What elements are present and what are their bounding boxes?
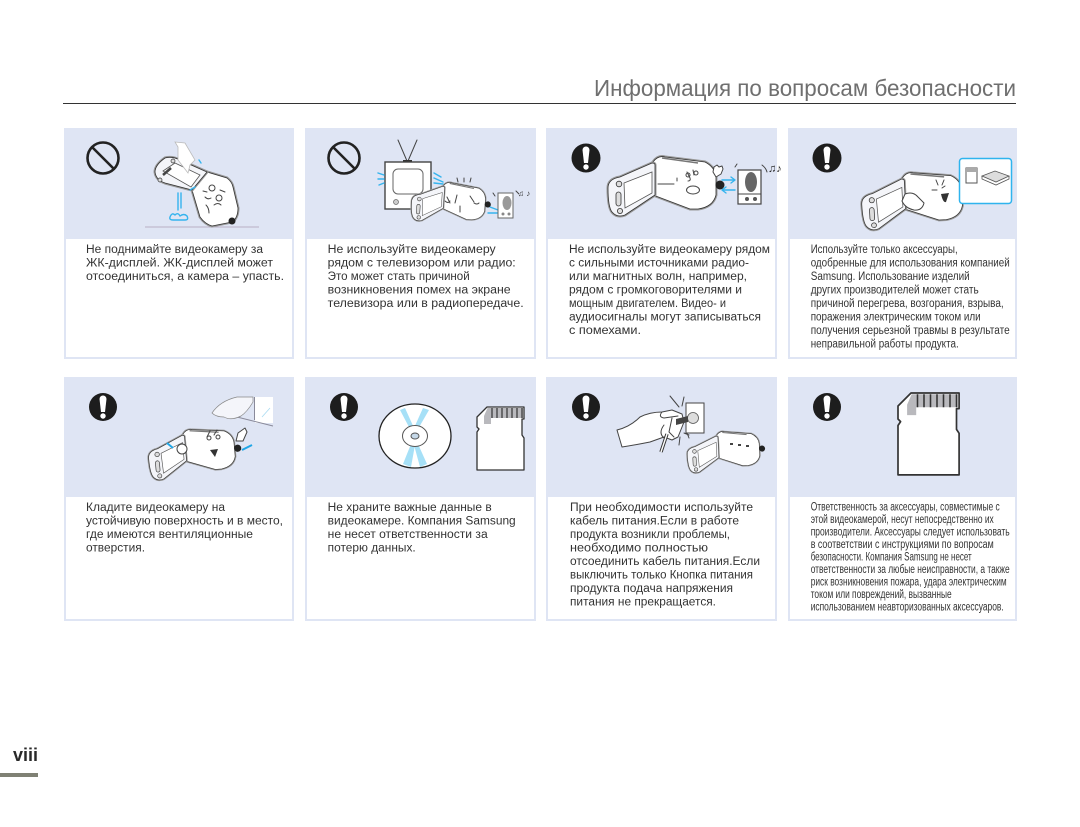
text block: необходимо полностью bbox=[570, 542, 708, 554]
text block: питания не прекращается. bbox=[570, 596, 716, 608]
text block: ЖК-дисплей. ЖК-дисплей может bbox=[86, 258, 274, 270]
text block: видеокамере. Компания Samsung bbox=[328, 516, 516, 528]
icon: caution bbox=[813, 393, 841, 421]
footer bar bbox=[0, 773, 38, 777]
text block: или магнитных волн, например, bbox=[569, 271, 747, 283]
panel: power cable bbox=[546, 377, 777, 621]
icon: caution bbox=[330, 393, 358, 421]
text block: Кладите видеокамеру на bbox=[86, 502, 226, 514]
text block: выключить только Кнопка питания bbox=[570, 570, 753, 582]
illustration: camera with accessories bbox=[860, 158, 1012, 230]
icon: prohibited bbox=[88, 142, 118, 174]
text block: кабель питания.Если в работе bbox=[570, 516, 739, 528]
text block bbox=[86, 244, 284, 283]
page number: viii bbox=[13, 745, 38, 765]
text block: Samsung. Использование изделий bbox=[811, 271, 970, 283]
text block: отсоединить кабель питания.Если bbox=[570, 556, 760, 568]
text block: Ответственность за аксессуары, совместимые с bbox=[811, 502, 1000, 514]
text block: Не используйте видеокамеру bbox=[328, 244, 496, 256]
illustration: camera and loudspeaker bbox=[608, 157, 782, 216]
illustration: camera and loudspeaker: ♫♪ bbox=[768, 163, 782, 175]
text block bbox=[328, 502, 516, 554]
text block bbox=[811, 244, 1010, 350]
text block: аудиосигналы могут записываться bbox=[569, 312, 761, 324]
illustration: hand unplugging cable bbox=[617, 396, 766, 473]
text block: продукта подача напряжения bbox=[570, 583, 733, 595]
icon: caution bbox=[572, 393, 600, 421]
text block bbox=[328, 244, 524, 310]
text block: этой видеокамерой, несут непосредственно их bbox=[811, 514, 994, 526]
text block: получения серьезной травмы в результате bbox=[811, 325, 1010, 337]
text block bbox=[570, 502, 760, 608]
icon: caution bbox=[812, 144, 842, 172]
text block: неправильной работы продукта. bbox=[811, 338, 959, 350]
icon: prohibited bbox=[328, 142, 360, 174]
text block: безопасности. Компания Samsung не несет bbox=[811, 552, 972, 564]
text block: Используйте только аксессуары, bbox=[811, 244, 958, 256]
panel: do not lift by LCD bbox=[64, 128, 294, 359]
icon: caution bbox=[89, 393, 117, 421]
text block: риск возникновения пожара, удара электрическим bbox=[811, 576, 1007, 588]
text block: мощным двигателем. Видео- и bbox=[569, 298, 726, 310]
text block: Не поднимайте видеокамеру за bbox=[86, 244, 264, 256]
panel: do not use near TV or radio bbox=[305, 128, 536, 359]
illustration: memory card bbox=[477, 407, 524, 470]
panel: accessories responsibility bbox=[788, 377, 1017, 621]
text block: рядом с громкоговорителями и bbox=[569, 284, 742, 296]
text block: одобренные для использования компанией bbox=[811, 258, 1010, 270]
text block: отсоединиться, а камера – упасть. bbox=[86, 271, 284, 283]
text block: Не используйте видеокамеру рядом bbox=[569, 244, 770, 256]
illustration: memory card bbox=[898, 393, 959, 475]
text block: отверстия. bbox=[86, 542, 145, 554]
text block bbox=[569, 244, 770, 337]
illustration: TV, camera and speaker bbox=[378, 140, 530, 226]
text block: током или повреждений, вызванные bbox=[811, 589, 952, 601]
text block: поражения электрическим током или bbox=[811, 312, 981, 324]
illustration: TV, camera and speaker: ♫ ♪ bbox=[518, 189, 530, 198]
text block: устойчивую поверхность и в место, bbox=[86, 516, 283, 528]
callout: accessories box bbox=[960, 158, 1012, 204]
text block: При необходимости используйте bbox=[570, 502, 753, 514]
illustration: disc bbox=[379, 404, 451, 468]
text block: возникновения помех на экране bbox=[328, 284, 511, 296]
icon: caution bbox=[572, 144, 600, 172]
text block: рядом с телевизором или радио: bbox=[328, 258, 516, 270]
panel: stable surface and ventilation bbox=[64, 377, 294, 621]
text block: производители. Аксессуары следует использовать bbox=[811, 526, 1010, 538]
text block: потерю данных. bbox=[328, 542, 416, 554]
title: Информация по вопросам безопасности bbox=[594, 75, 1016, 101]
text block: использованием неавторизованных аксессуаров. bbox=[811, 602, 1004, 614]
panel: use only approved accessories bbox=[788, 128, 1017, 359]
text block: телевизора или в радиопередаче. bbox=[328, 298, 524, 310]
text block: причиной перегрева, возгорания, взрыва, bbox=[811, 298, 1004, 310]
text block bbox=[86, 502, 283, 554]
text block: с помехами. bbox=[569, 325, 641, 337]
panel: do not store important data bbox=[305, 377, 536, 621]
text block: с сильными источниками радио- bbox=[569, 258, 749, 270]
illustration: camera lifted by display bbox=[145, 142, 259, 227]
panel: do not use near strong radio or magnetic sources bbox=[546, 128, 782, 359]
text block: где имеются вентиляционные bbox=[86, 529, 253, 541]
text block: ответственности за любые неисправности, а также bbox=[811, 564, 1010, 576]
text block: Это может стать причиной bbox=[328, 271, 470, 283]
text block bbox=[811, 502, 1010, 614]
text block: в соответствии с инструкциями по вопросам bbox=[811, 539, 994, 551]
illustration: camera near window bbox=[146, 397, 273, 481]
text block: продукта возникли проблемы, bbox=[570, 529, 730, 541]
text block: не несет ответственности за bbox=[328, 529, 488, 541]
text block: других производителей может стать bbox=[811, 284, 979, 296]
text block: Не храните важные данные в bbox=[328, 502, 492, 514]
